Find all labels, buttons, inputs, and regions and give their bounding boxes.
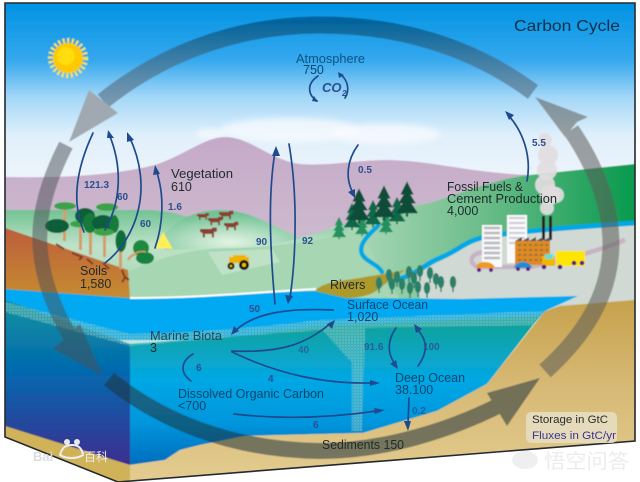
storage labels: Surface Ocean [347, 298, 428, 312]
sea floor sand [118, 300, 635, 482]
clouds [196, 118, 440, 144]
storage labels: Rivers [330, 278, 365, 292]
title: Carbon Cycle [514, 18, 620, 35]
storage labels: Dissolved Organic Carbon [178, 387, 324, 401]
icon: truck [542, 251, 585, 269]
co2 symbol [310, 72, 348, 102]
river delta [316, 270, 405, 298]
flux arrows [77, 111, 528, 431]
hill with grazing animals [160, 210, 300, 250]
icon: orange car [476, 262, 495, 272]
road [472, 240, 625, 267]
flux values: 4 [268, 374, 274, 385]
sky [5, 3, 635, 193]
storage labels: Soils [80, 264, 107, 278]
green ridge [330, 164, 635, 300]
pine forest [332, 181, 418, 239]
flux values: 6 [313, 420, 319, 431]
cycle arrow: bottom [109, 378, 540, 451]
watermark: baidu baike: Bai [33, 449, 53, 464]
ocean: main body [130, 316, 540, 465]
storage labels: 4,000 [447, 204, 478, 218]
plant roots [56, 244, 129, 282]
icon: buildings [482, 215, 527, 267]
flux values [84, 138, 546, 431]
cycle arrow: top [69, 25, 533, 142]
flux values: 121.3 [84, 180, 109, 191]
storage labels: Marine Biota [150, 329, 222, 343]
white shoreline [130, 289, 316, 298]
ocean: surface layer [5, 289, 578, 340]
flux values: 1.6 [168, 202, 182, 213]
co2 symbol: CO [322, 80, 342, 95]
lower field [128, 232, 400, 300]
storage labels [80, 167, 557, 452]
flux values: 0.5 [358, 165, 372, 176]
storage labels: 1,020 [347, 310, 378, 324]
storage labels: Cement Production [447, 192, 557, 206]
grey industrial land [415, 221, 635, 310]
icon: sun [51, 41, 85, 75]
city and factory [476, 133, 585, 272]
small coastal trees [376, 265, 456, 298]
icon: blue car [514, 262, 532, 271]
left sea bed strip [5, 426, 130, 482]
icon: factory [515, 216, 552, 265]
icon: tree canopies [45, 202, 126, 252]
flux values: 0.2 [412, 406, 426, 417]
icon: tractor [228, 255, 249, 270]
ocean: left cutaway [5, 300, 130, 465]
storage labels: 1,580 [80, 277, 111, 291]
cycle arrow: left descending [40, 145, 103, 376]
atmosphere label: Atmosphere [296, 52, 365, 66]
watermark: wukong wenda [512, 450, 629, 473]
icon: tree trunks [63, 209, 122, 269]
watermark: baidu baike [33, 439, 108, 464]
storage labels: <700 [178, 399, 206, 413]
legend: Storage in GtC [532, 414, 608, 426]
watermark: baidu baike: 百科 [84, 450, 108, 464]
flux values: 60 [117, 192, 129, 203]
legend [526, 412, 617, 443]
storage labels: 38.100 [395, 383, 433, 397]
flux values: 100 [423, 342, 440, 353]
storage labels: Fossil Fuels & [447, 180, 524, 194]
flux values: 50 [249, 304, 261, 315]
forest trees [45, 202, 173, 269]
icon: shrub [128, 240, 154, 264]
icon: smoke [535, 133, 564, 215]
field stripes [208, 249, 280, 275]
soil block [5, 228, 130, 298]
icon: cattle [197, 211, 238, 237]
icon: fire [155, 232, 173, 249]
flux values: 60 [140, 219, 152, 230]
flux values: 90 [256, 237, 268, 248]
storage labels: Deep Ocean [395, 371, 465, 385]
watermark: wukong wenda: 悟空问答 [544, 450, 629, 473]
mountains [6, 136, 527, 238]
co2 symbol: 2 [341, 89, 347, 98]
storage labels: Sediments 150 [322, 438, 404, 452]
flux values: 91.6 [364, 342, 384, 353]
flux values: 6 [196, 363, 202, 374]
atmosphere label [296, 52, 365, 77]
flux values: 5.5 [532, 138, 546, 149]
storage labels: Vegetation [171, 167, 233, 181]
dotted thermocline band [5, 302, 545, 431]
storage labels: 3 [150, 341, 157, 355]
river system [361, 223, 635, 279]
atmosphere label: 750 [303, 63, 324, 77]
legend: Fluxes in GtC/yr [532, 430, 616, 442]
flux values: 92 [302, 236, 314, 247]
flux values: 40 [298, 345, 310, 356]
left green land [6, 209, 350, 299]
cycle arrow: right ascending [535, 97, 611, 371]
storage labels: 610 [171, 180, 192, 194]
